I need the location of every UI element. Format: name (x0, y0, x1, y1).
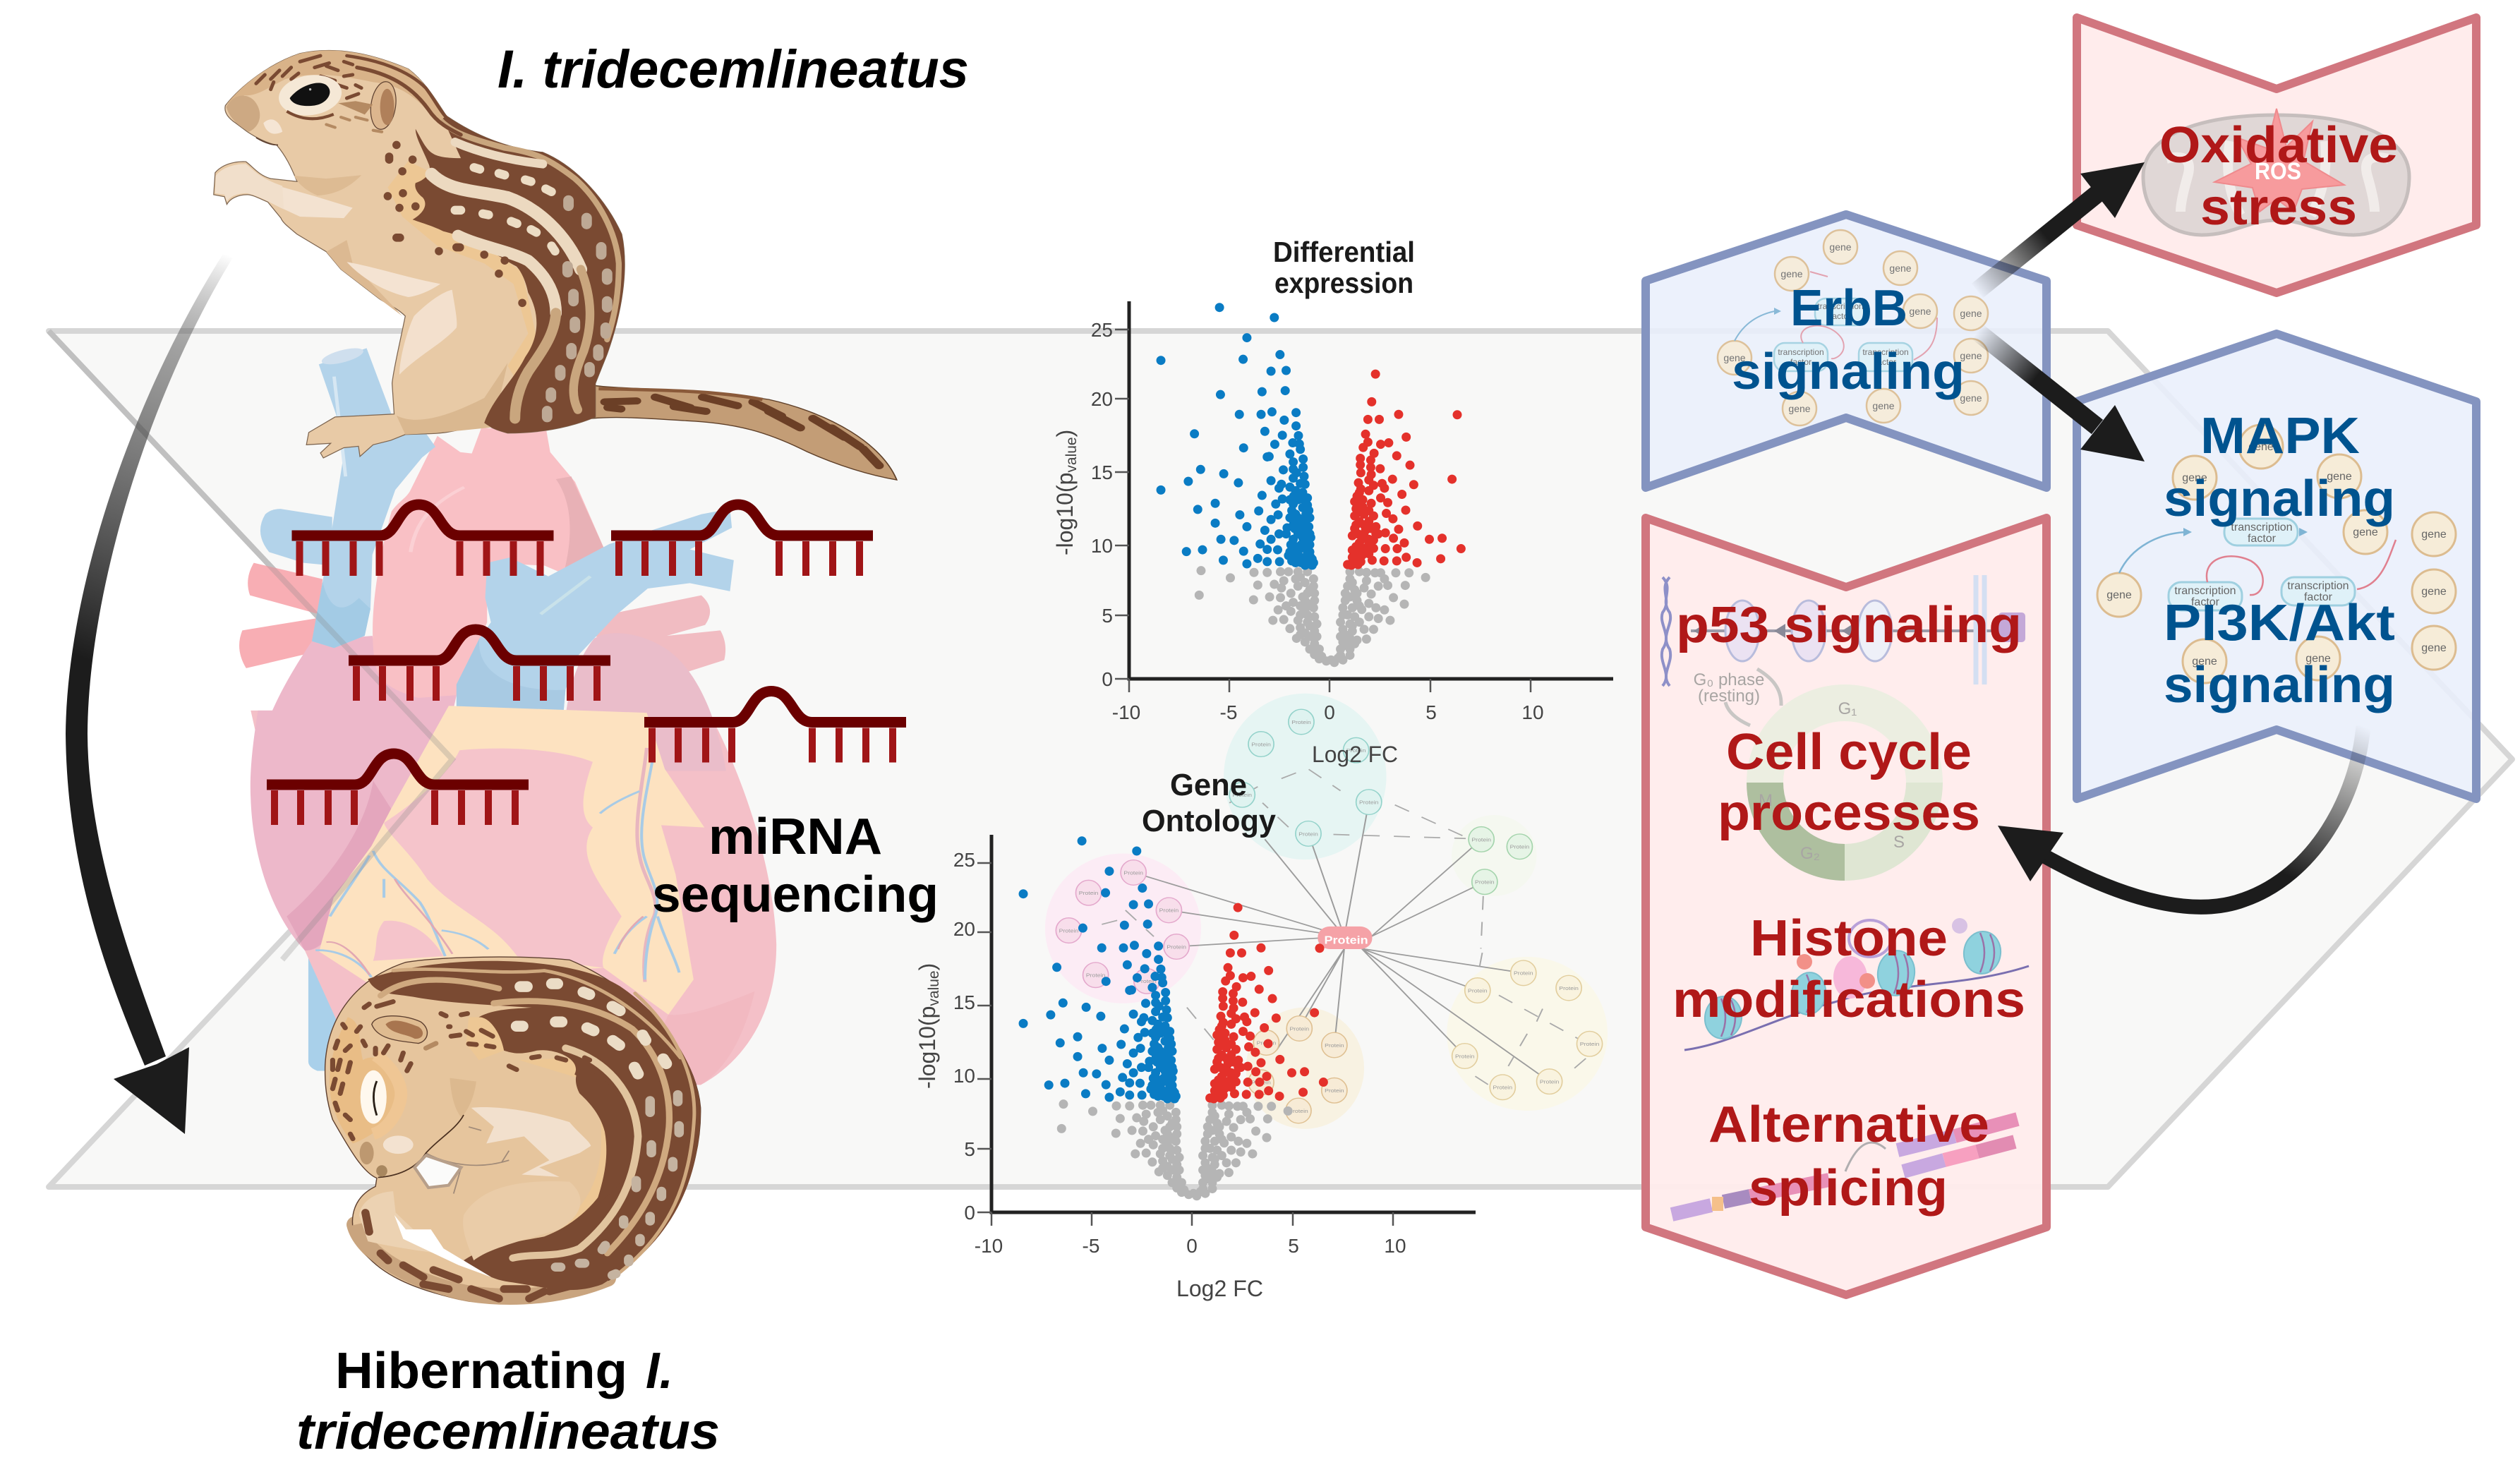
network: ErbB genes (1718, 230, 1988, 426)
label: Hibernating I. tridecemlineatus: tridecemlineatus (296, 1404, 720, 1460)
volcano 2 tick labels: -10 (975, 1235, 1003, 1257)
volcano 1 y label: ) (1052, 430, 1078, 437)
node labels: Protein (1123, 870, 1143, 876)
icon: spliced transcripts (1672, 1119, 2018, 1214)
volcano 2 x label: Log2 FC (1176, 1276, 1263, 1301)
text: ErbB signaling (1732, 280, 1965, 400)
volcano 2 tick labels: 25 (953, 849, 975, 871)
heading: Gene Ontology (1142, 768, 1277, 838)
node labels: Protein (1291, 719, 1311, 725)
node labels: Protein (1540, 1079, 1559, 1085)
volcano 1 y label: -log10(p (1052, 473, 1078, 555)
volcano 2 tick labels: -5 (1083, 1235, 1099, 1257)
network: ErbB genes: factor (1830, 311, 1851, 321)
text: p53 signaling: p53 signaling (1676, 597, 2022, 653)
heading: Gene Ontology: Gene (1170, 768, 1247, 802)
text: MAPK signaling: signaling (2164, 471, 2395, 527)
node labels: Protein (1580, 1042, 1599, 1047)
text: PI3K/Akt signaling (2164, 595, 2395, 713)
hibernating ground squirrel (325, 957, 701, 1302)
node labels: Protein (1257, 1040, 1276, 1046)
label: miRNA sequencing: miRNA (709, 809, 882, 865)
network: ErbB genes: gene (1960, 350, 1982, 361)
text: MAPK signaling: MAPK (2200, 408, 2360, 464)
big curved arrow: active to hibernating (66, 254, 233, 1134)
ear (368, 80, 399, 131)
heading: Differential expression: Differential (1273, 236, 1415, 268)
node labels: Protein (1325, 1088, 1344, 1094)
text: Oxidative stress: stress (2200, 179, 2357, 236)
text: Cell cycle processes (1718, 724, 1980, 841)
volcano 1 tick labels: 25 (1091, 319, 1113, 341)
coronary vessels (251, 706, 704, 1015)
label: miRNA sequencing (652, 809, 939, 923)
squirrel body (214, 50, 625, 458)
node labels: Protein (1475, 879, 1495, 885)
volcano 1 tick labels: 10 (1091, 535, 1113, 557)
text: Oxidative stress (2159, 117, 2398, 236)
label: Hibernating I. tridecemlineatus (296, 1343, 720, 1460)
node labels: Protein (1251, 742, 1271, 747)
network: MAPK genes: gene (2192, 656, 2217, 668)
network: ErbB genes: transcription (1862, 347, 1909, 357)
node labels: Protein (1166, 944, 1186, 950)
volcano 1 y label: value (1063, 437, 1080, 473)
text: Histone modifications: modifications (1672, 972, 2025, 1028)
network: MAPK genes: gene (2327, 471, 2352, 483)
node labels: Protein (1298, 831, 1318, 837)
nose (360, 1142, 374, 1164)
node labels: Protein (1514, 970, 1533, 977)
protein hub: Protein (1324, 934, 1368, 946)
grey spots (555, 1094, 679, 1275)
icon: nucleosomes (1684, 918, 2029, 1050)
volcano plot 1 (1052, 301, 1613, 767)
volcano 1 points (1161, 308, 1461, 663)
network: ErbB genes: gene (1960, 392, 1982, 404)
text: Alternative splicing: Alternative (1708, 1097, 1989, 1153)
heart upper vessels (239, 345, 734, 771)
brown back (413, 94, 625, 433)
node labels: Protein (1455, 1054, 1474, 1059)
volcano 1 axes (1115, 301, 1613, 692)
volcano 2 y label: value (926, 970, 942, 1006)
network: MAPK genes: gene (2182, 472, 2207, 484)
network: ErbB genes: transcription (1817, 301, 1864, 311)
network: MAPK genes: gene (2421, 642, 2447, 654)
cream nodes (1452, 960, 1603, 1100)
snout line (378, 1115, 464, 1178)
node labels: Protein (1325, 1042, 1344, 1049)
eye (276, 71, 344, 119)
teal nodes (1229, 709, 1382, 846)
node labels: Protein (1137, 979, 1157, 984)
panel: downstream processes (1646, 518, 2046, 1295)
back stripes (432, 105, 619, 418)
green nodes (1469, 827, 1533, 894)
node labels: Protein (1289, 1108, 1308, 1114)
icon: cell cycle ring: S (1893, 833, 1905, 852)
face spots (332, 1001, 590, 1139)
text: Oxidative stress: Oxidative (2159, 117, 2398, 174)
node labels: Protein (1232, 792, 1252, 798)
volcano 2 tick labels (953, 849, 1406, 1257)
back spots grey (547, 200, 607, 417)
icon: cell cycle ring: M (1759, 791, 1773, 810)
node labels (1059, 719, 1599, 1114)
volcano 1 tick labels: 0 (1324, 701, 1335, 723)
network: ErbB genes: transcription (1778, 347, 1824, 357)
network: MAPK genes: gene (2421, 586, 2447, 598)
node labels: Protein (1510, 844, 1529, 850)
network: ErbB genes: factor (1790, 357, 1811, 367)
heart illustration (49, 331, 776, 1085)
icon: p53 pathway (1662, 575, 2025, 686)
left plane edge seen through heart (49, 331, 452, 960)
heading: Gene Ontology: Ontology (1142, 804, 1277, 838)
icon: cell cycle ring (1694, 669, 1924, 863)
heart lower body (251, 711, 776, 1085)
nose patch (227, 96, 260, 132)
network: MAPK genes: gene (2248, 441, 2274, 453)
text: PI3K/Akt signaling: signaling (2164, 657, 2395, 713)
protein hub (1318, 927, 1372, 949)
text: Alternative splicing: splicing (1749, 1160, 1948, 1217)
orange fringe (560, 1103, 609, 1229)
network: MAPK genes: gene (2106, 589, 2132, 601)
arrow: ErbB to MAPK (1977, 332, 2145, 461)
network: MAPK genes: factor (2304, 591, 2333, 603)
node labels: Protein (1079, 891, 1098, 896)
text: Cell cycle processes: Cell cycle (1726, 724, 1972, 780)
network: ErbB genes: gene (1872, 400, 1895, 411)
volcano 2 tick labels: 5 (1288, 1235, 1299, 1257)
standing ground squirrel (214, 50, 897, 480)
panel: MAPK and PI3K/Akt signaling (2077, 334, 2476, 799)
node labels: Protein (1159, 907, 1178, 914)
volcano 1 tick labels: -10 (1112, 701, 1140, 723)
volcano 2 tick labels: 10 (953, 1065, 975, 1087)
miRNA strands (267, 505, 906, 825)
volcano 2 tick labels: 0 (964, 1202, 975, 1224)
fur patches (267, 183, 353, 218)
head top fur (227, 50, 446, 123)
heading: Differential expression: expression (1274, 267, 1413, 299)
icon: cell cycle ring: G₂ (1800, 844, 1820, 863)
node labels: Protein (1359, 800, 1379, 805)
volcano 2 y label: ) (915, 963, 940, 970)
shoulder spots (387, 145, 522, 303)
volcano 2 tick labels: 20 (953, 918, 975, 940)
icon: cell cycle ring: G₀ phase (1694, 670, 1764, 689)
closed eye (361, 1070, 387, 1123)
node labels: Protein (1471, 837, 1491, 843)
bubble clusters (1045, 694, 1608, 1129)
text: Alternative splicing (1708, 1097, 1989, 1217)
network: ErbB genes: gene (1780, 268, 1803, 279)
network: ErbB genes: gene (1829, 241, 1852, 253)
back spots cream (455, 167, 555, 251)
tail spots (366, 1213, 577, 1298)
node labels: Protein (1059, 928, 1078, 934)
network: ErbB genes: gene (1960, 308, 1982, 319)
node labels: Protein (1346, 748, 1365, 754)
icon: cell cycle ring: G₁ (1838, 699, 1857, 718)
volcano 1 tick labels: 0 (1102, 668, 1113, 690)
face marks (326, 102, 382, 132)
text: ErbB signaling: ErbB (1790, 280, 1907, 337)
network: MAPK genes: gene (2305, 653, 2331, 665)
node labels: Protein (1086, 972, 1105, 978)
volcano 1 tick labels: 15 (1091, 461, 1113, 483)
pink nodes (1056, 860, 1189, 994)
network: MAPK genes: factor (2248, 533, 2277, 545)
node labels: Protein (1493, 1085, 1512, 1090)
squirrel tail (592, 385, 897, 480)
network links (1133, 802, 1550, 1082)
brown fur (368, 961, 701, 1290)
text: MAPK signaling (2164, 408, 2395, 527)
ear (372, 1016, 427, 1044)
network: MAPK genes: gene (2421, 529, 2447, 541)
volcano 2 axes (977, 835, 1476, 1226)
volcano 1 tick labels: -5 (1220, 701, 1237, 723)
network: ErbB genes: factor (1875, 357, 1896, 367)
icon: cell cycle ring: (resting) (1698, 687, 1760, 706)
gaps between limbs (414, 1155, 461, 1188)
icon: mitochondrion (2143, 115, 2409, 235)
cream spots (517, 984, 666, 1074)
volcano 2 y label: -log10(p (915, 1006, 940, 1089)
node labels: Protein (1559, 986, 1579, 991)
orange fringe (387, 161, 537, 380)
volcano 2 points (1023, 841, 1323, 1196)
network: MAPK genes: transcription (2287, 580, 2349, 592)
label: Hibernating I. tridecemlineatus: Hibernating (335, 1343, 627, 1399)
volcano 2 tick labels: 10 (1384, 1235, 1406, 1257)
network: MAPK genes: transcription (2174, 585, 2236, 597)
curled body (325, 957, 701, 1302)
curled tail (356, 1224, 608, 1296)
node labels: Protein (1290, 1026, 1309, 1032)
panel: oxidative stress (2077, 18, 2476, 293)
network: MAPK genes: gene (2353, 526, 2378, 538)
network: ErbB genes: gene (1723, 352, 1746, 363)
species label: I. tridecemlineatus: I. tridecemlineatus (498, 40, 969, 99)
stripes (380, 970, 694, 1272)
volcano 1 tick labels: 5 (1102, 605, 1113, 627)
text: Cell cycle processes: processes (1718, 785, 1980, 841)
network: MAPK genes (2097, 425, 2456, 683)
panel: ErbB signaling (1646, 215, 2046, 488)
network: MAPK genes: transcription (2231, 521, 2293, 533)
tan nodes (1248, 1016, 1347, 1123)
icon: ROS star: ROS (2255, 158, 2301, 185)
icon: ROS star (2214, 109, 2344, 212)
volcano 2 tick labels: 15 (953, 991, 975, 1013)
text: PI3K/Akt signaling: PI3K/Akt (2164, 595, 2395, 651)
arrow: PI3K/Akt to cell cycle (1998, 726, 2363, 907)
background plane (49, 331, 2512, 1187)
label: miRNA sequencing: sequencing (652, 867, 939, 923)
volcano 2 tick labels: 0 (1186, 1235, 1198, 1257)
volcano 2 tick labels: 5 (964, 1138, 975, 1160)
text: Histone modifications (1672, 910, 2025, 1028)
volcano 1 tick labels: 5 (1425, 701, 1437, 723)
volcano 1 tick labels: 20 (1091, 388, 1113, 410)
network: MAPK genes: factor (2191, 596, 2220, 608)
node labels: Protein (1468, 988, 1488, 994)
belly patch (471, 1107, 591, 1177)
text: Histone modifications: Histone (1750, 910, 1948, 967)
heading: Differential expression (1273, 236, 1415, 299)
node labels: Protein (1251, 1080, 1271, 1086)
volcano 1 x label: Log2 FC (1312, 742, 1398, 767)
volcano 1 tick labels: 10 (1521, 701, 1544, 723)
volcano plot 2 (915, 835, 1476, 1301)
network: ErbB genes: gene (1909, 306, 1931, 317)
arrow: ErbB to oxidative stress (1977, 162, 2145, 291)
volcano 1 tick labels (1091, 319, 1544, 723)
text: ErbB signaling: signaling (1732, 344, 1965, 400)
gene ontology network (1045, 694, 1608, 1129)
network: ErbB genes: gene (1889, 263, 1912, 274)
label: Hibernating I. tridecemlineatus: I. (646, 1343, 673, 1399)
network: ErbB genes: gene (1788, 403, 1811, 414)
